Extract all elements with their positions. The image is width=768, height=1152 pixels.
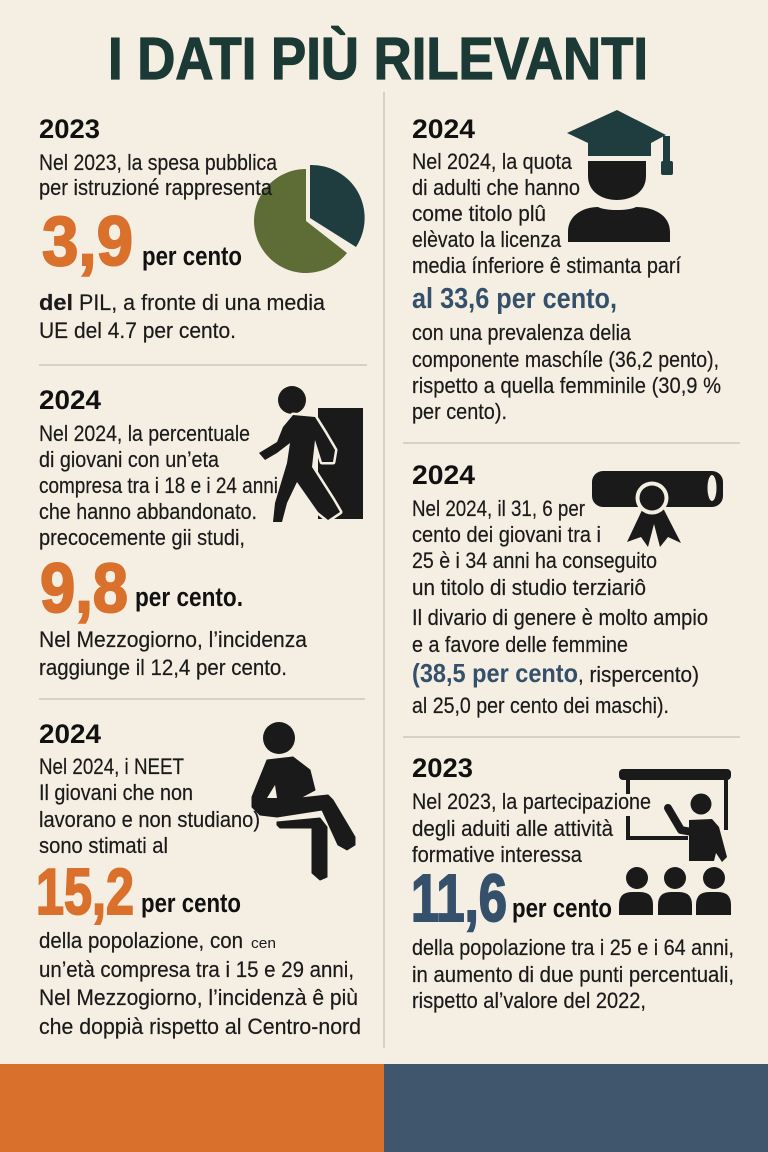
intro text: media ínferiore ê stimanta parí xyxy=(412,253,681,278)
closing text: PIL, a fronte di una media xyxy=(79,290,326,315)
closing text: un’età compresa tra i 15 e 29 anni, xyxy=(39,957,354,982)
intro text: Nel 2023, la spesa pubblica xyxy=(39,150,278,175)
intro text: Nel 2024, la quota xyxy=(412,149,573,174)
intro text: cento dei giovani tra i xyxy=(412,522,601,547)
closing text xyxy=(39,290,326,343)
closing text: Nel Mezzogiorno, l’incidenzà ê più xyxy=(39,985,358,1010)
intro text: come titolo plû xyxy=(412,201,546,226)
intro text: degli aduiti alle attività xyxy=(412,816,614,841)
closing text: UE del 4.7 per cento. xyxy=(39,318,236,343)
title: I DATI PIÙ RILEVANTI xyxy=(108,26,648,92)
panel: NEET 2024 xyxy=(36,719,361,1039)
intro text: Nel 2024, i NEET xyxy=(39,754,184,779)
intro text: Nel 2024, la percentuale xyxy=(39,421,250,446)
intro text: precocemente gii studi, xyxy=(39,525,245,550)
icon: person walking out of a door xyxy=(259,386,363,522)
year: 2024 xyxy=(412,114,475,144)
intro text xyxy=(412,149,681,278)
intro text: e a favore delle femmine xyxy=(412,632,628,657)
panel: public spending 2023 xyxy=(39,114,365,343)
year: 2024 xyxy=(39,719,101,749)
closing text: per cento). xyxy=(412,399,507,424)
icon: graduate with mortarboard xyxy=(567,110,673,242)
key figure 11,6: 11,6 xyxy=(411,861,507,936)
intro text: Il giovani che non xyxy=(39,780,193,805)
intro text xyxy=(39,754,260,858)
unit label: per cento xyxy=(512,893,612,923)
intro text xyxy=(39,421,278,550)
closing text: in aumento di due punti percentuali, xyxy=(412,962,734,987)
key figure 38,5 per cento: (38,5 per cento xyxy=(412,658,578,688)
panel: lower secondary qualification 2024 xyxy=(412,110,721,424)
closing text xyxy=(412,320,721,424)
closing text: che doppià rispetto al Centro-nord xyxy=(39,1014,361,1039)
closing text: Nel Mezzogiorno, l’incidenza xyxy=(39,627,308,652)
intro text: Il divario di genere è molto ampio xyxy=(412,605,708,630)
intro text xyxy=(39,150,278,200)
year: 2023 xyxy=(39,114,100,144)
intro text: di adulti che hanno xyxy=(412,175,580,200)
panel: tertiary qualification 2024 xyxy=(412,460,723,718)
year: 2024 xyxy=(412,460,475,490)
closing text xyxy=(39,627,308,680)
intro text xyxy=(412,789,651,867)
icon: seated person xyxy=(252,722,355,880)
intro text: che hanno abbandonato. xyxy=(39,499,257,524)
intro text: per istruzioné rappresenta xyxy=(39,175,273,200)
panel: adult training 2023 xyxy=(411,753,734,1013)
closing text: della popolazione, con xyxy=(39,928,243,953)
intro text: formative interessa xyxy=(412,842,583,867)
closing text: componente maschíle (36,2 pento), xyxy=(412,347,719,372)
closing text: con una prevalenza delia xyxy=(412,320,632,345)
closing text: al 25,0 per cento dei maschi). xyxy=(412,693,669,718)
intro text xyxy=(412,496,708,657)
key figure 33,6 per cento: al 33,6 per cento, xyxy=(412,283,617,315)
key figure 9,8: 9,8 xyxy=(40,549,128,627)
closing text: raggiunge il 12,4 per cento. xyxy=(39,655,287,680)
intro text: un titolo di studio terziariô xyxy=(412,575,646,600)
year: 2023 xyxy=(412,753,473,783)
closing text: rispetto a quella femminile (30,9 % xyxy=(412,373,721,398)
intro text: Nel 2024, il 31, 6 per xyxy=(412,496,585,521)
unit label: per cento xyxy=(141,888,241,918)
closing text xyxy=(412,662,699,718)
closing text: , rispercento) xyxy=(578,662,699,687)
panel: early school leavers 2024 xyxy=(39,385,363,680)
unit label: per cento. xyxy=(135,582,243,612)
icon: diploma scroll with seal xyxy=(592,471,723,547)
icon: pie chart xyxy=(254,165,365,273)
intro text: lavorano e non studiano) xyxy=(39,807,260,832)
intro text: elèvato la licenza xyxy=(412,227,562,252)
closing text: rispetto al’valore del 2022, xyxy=(412,988,646,1013)
intro text: sono stimati al xyxy=(39,833,168,858)
footer band: navy xyxy=(384,1064,768,1152)
key figure 3,9: 3,9 xyxy=(42,202,133,280)
intro text: di giovani con un’eta xyxy=(39,447,220,472)
closing text: della popolazione tra i 25 e i 64 anni, xyxy=(412,935,734,960)
intro text: Nel 2023, la partecipazione xyxy=(412,789,651,814)
footer band: orange xyxy=(0,1064,384,1152)
intro text: compresa tra i 18 e i 24 anni xyxy=(39,473,278,498)
intro text: 25 è i 34 anni ha conseguito xyxy=(412,548,657,573)
closing text: cen xyxy=(251,935,276,952)
unit label: per cento xyxy=(142,241,242,271)
closing text xyxy=(412,935,734,1013)
closing text xyxy=(39,928,361,1039)
icon: teacher at board with audience xyxy=(619,769,731,915)
closing text: del xyxy=(39,290,73,315)
year: 2024 xyxy=(39,385,101,415)
key figure 15,2: 15,2 xyxy=(36,855,134,928)
